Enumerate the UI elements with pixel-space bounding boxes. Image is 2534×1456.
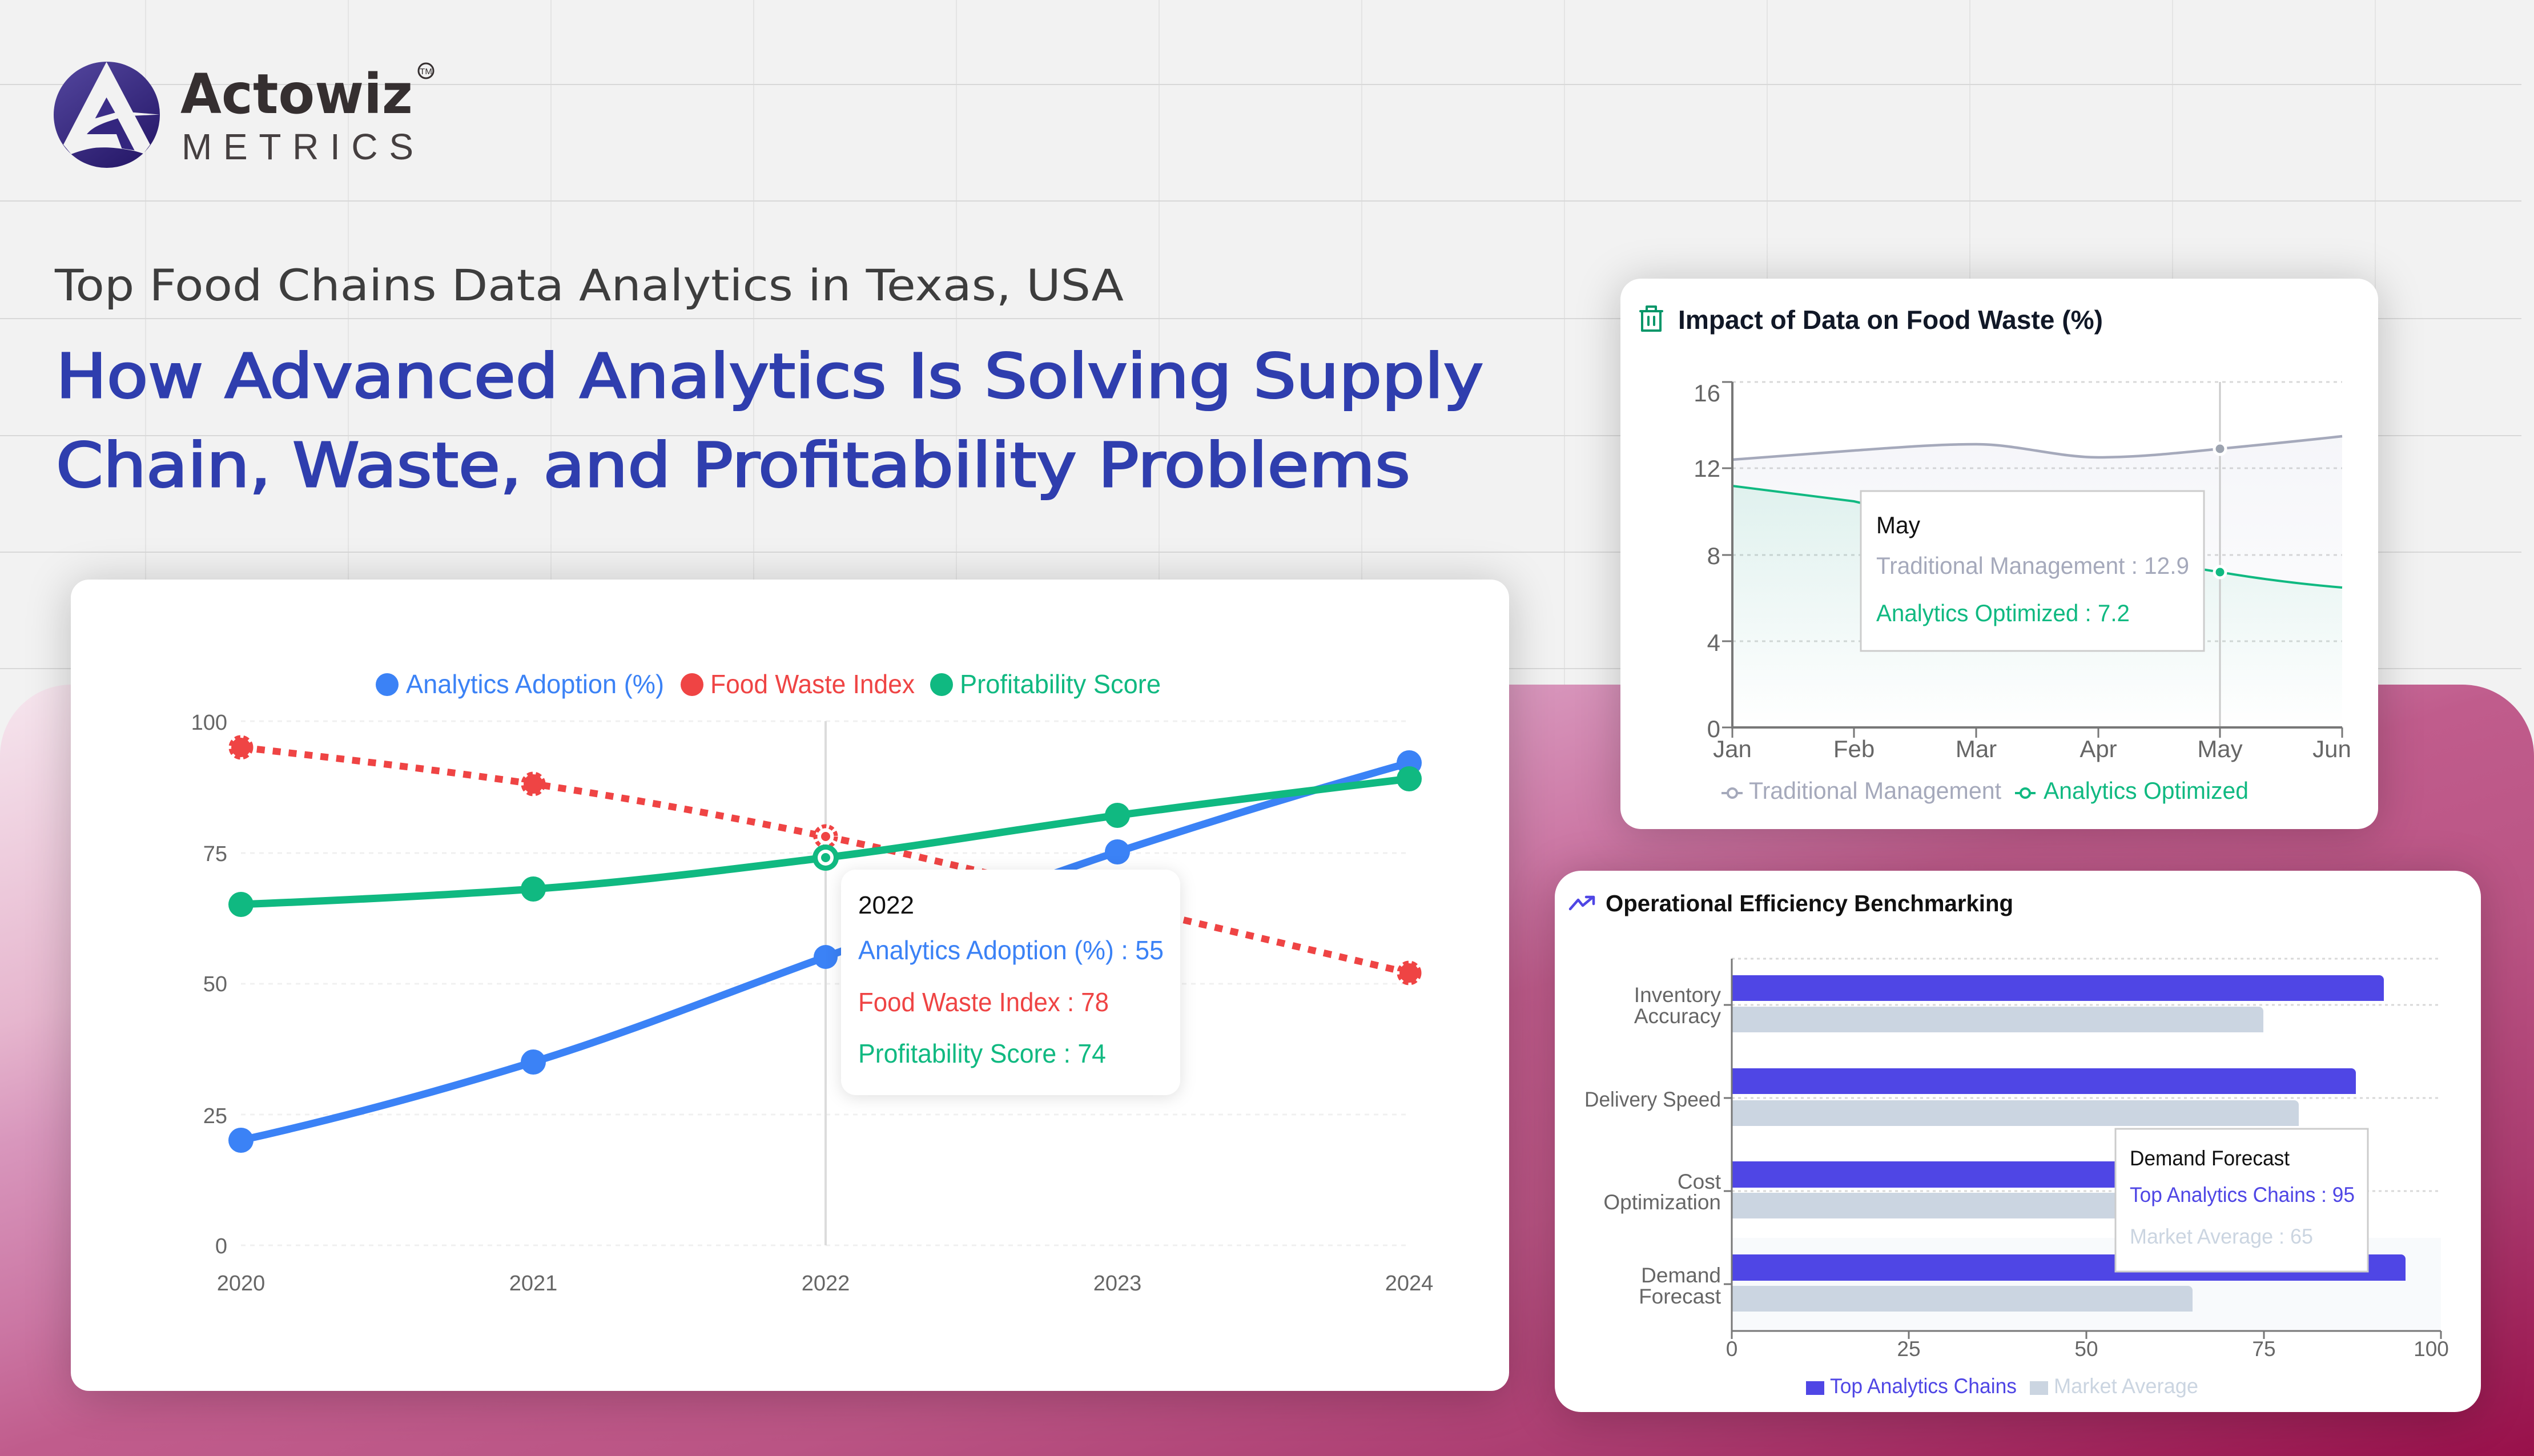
y axis labels: 16 [1694, 380, 1720, 407]
y axis labels: 0 [1707, 715, 1720, 742]
category labels [1584, 983, 1721, 1308]
category labels: Optimization [1603, 1190, 1721, 1214]
tooltip: May: Analytics Optimized : 7.2 [1876, 600, 2130, 626]
x axis labels [1713, 735, 2351, 762]
category labels: Cost [1678, 1170, 1721, 1193]
bars: delivery speed [1732, 1068, 2356, 1126]
tooltip: 2022: Profitability Score : 74 [858, 1039, 1106, 1068]
tooltip: demand forecast: Market Average : 65 [2130, 1225, 2313, 1248]
x axis labels: 2022 [802, 1272, 850, 1296]
x axis labels: 2021 [509, 1272, 557, 1296]
category labels: Forecast [1639, 1285, 1721, 1308]
x axis labels: Jun [2312, 735, 2351, 762]
x axis labels: 2024 [1385, 1272, 1433, 1296]
x axis labels: 100 [2414, 1337, 2449, 1361]
logo wordmark: TM [420, 67, 432, 77]
x axis labels: 0 [1726, 1337, 1737, 1361]
y axis labels: 75 [203, 842, 227, 866]
category labels: Demand [1641, 1264, 1721, 1287]
y axis labels [191, 711, 227, 1258]
y axis labels [1694, 380, 1720, 742]
x axis labels: 75 [2252, 1337, 2276, 1361]
area: analytics optimized [1732, 486, 2342, 727]
y axis labels: 8 [1707, 542, 1720, 569]
tooltip: May: Traditional Management : 12.9 [1876, 552, 2189, 579]
panel: impact of data on food waste [1620, 279, 2378, 829]
card title: Operational Efficiency Benchmarking [1606, 890, 2013, 916]
active dots [2214, 443, 2226, 578]
line: analytics optimized [1732, 486, 2342, 588]
x axis labels [1726, 1337, 2449, 1361]
tooltip: May [1861, 491, 2204, 651]
icon: trash [1640, 307, 1662, 331]
heading: How Advanced Analytics Is Solving Supply [56, 341, 1483, 412]
tooltip: demand forecast: Top Analytics Chains : 95 [2130, 1183, 2355, 1206]
bars: demand forecast [1732, 1254, 2406, 1312]
y axis labels: 100 [191, 711, 227, 735]
legend [376, 669, 1161, 699]
legend: Market Average [2054, 1374, 2198, 1398]
legend: Top Analytics Chains [1830, 1374, 2017, 1398]
x axis labels [217, 1272, 1433, 1296]
category labels: Accuracy [1634, 1004, 1721, 1028]
heading [56, 341, 1483, 501]
tooltip: 2022: Analytics Adoption (%) : 55 [858, 935, 1164, 965]
logo wordmark: METRICS [182, 126, 413, 167]
category labels: Inventory [1634, 983, 1721, 1007]
y axis labels: 0 [215, 1234, 227, 1258]
area: traditional management [1732, 436, 2342, 727]
logo: Actowiz Metrics [54, 62, 434, 168]
line: analytics adoption [228, 750, 1422, 1153]
legend: Analytics Adoption (%) [406, 669, 664, 699]
tooltip: May: May [1876, 512, 1920, 538]
line: food waste index [231, 738, 1419, 983]
x axis labels: 50 [2074, 1337, 2098, 1361]
subtitle: Top Food Chains Data Analytics in Texas, USA [54, 260, 1124, 311]
axes [1722, 382, 2342, 738]
x axis labels: May [2197, 735, 2243, 762]
y axis labels: 50 [203, 972, 227, 996]
panel: operational efficiency benchmarking [1555, 871, 2481, 1412]
y axis labels: 12 [1694, 455, 1720, 482]
logo wordmark: Actowiz [180, 62, 413, 126]
panel: main line chart [71, 580, 1509, 1391]
legend [1721, 777, 2249, 804]
background panel: pink gradient [0, 685, 2534, 1456]
x axis labels: Feb [1833, 735, 1875, 762]
x axis labels: 2020 [217, 1272, 265, 1296]
logo wordmark [180, 62, 433, 167]
y axis labels: 4 [1707, 629, 1720, 656]
icon: trending up [1570, 897, 1594, 909]
x axis labels: Mar [1956, 735, 1997, 762]
legend: Profitability Score [960, 669, 1161, 699]
tooltip: demand forecast [2115, 1129, 2368, 1272]
category labels: Delivery Speed [1584, 1088, 1721, 1111]
title block [54, 260, 1483, 501]
axes [1724, 959, 2441, 1339]
icon: logo emblem [54, 62, 160, 168]
x axis labels: 25 [1897, 1337, 1921, 1361]
heading: Chain, Waste, and Profitability Problems [56, 431, 1410, 501]
line: traditional management [1732, 436, 2342, 460]
tooltip: 2022: 2022 [858, 891, 914, 919]
legend: Analytics Optimized [2044, 777, 2249, 804]
x axis labels: 2023 [1093, 1272, 1141, 1296]
legend: Traditional Management [1749, 777, 2001, 804]
line: profitability score [228, 766, 1422, 917]
tooltip: 2022 [841, 870, 1180, 1095]
legend [1806, 1374, 2198, 1398]
tooltip: 2022: Food Waste Index : 78 [858, 987, 1109, 1017]
x axis labels: Apr [2080, 735, 2117, 762]
x axis labels: Jan [1713, 735, 1752, 762]
legend: Food Waste Index [710, 669, 915, 699]
y axis labels: 25 [203, 1104, 227, 1128]
card title: Impact of Data on Food Waste (%) [1678, 305, 2103, 335]
bars: inventory accuracy [1732, 975, 2384, 1032]
tooltip: demand forecast: Demand Forecast [2130, 1147, 2290, 1170]
bars: cost optimization [1732, 1161, 2339, 1218]
